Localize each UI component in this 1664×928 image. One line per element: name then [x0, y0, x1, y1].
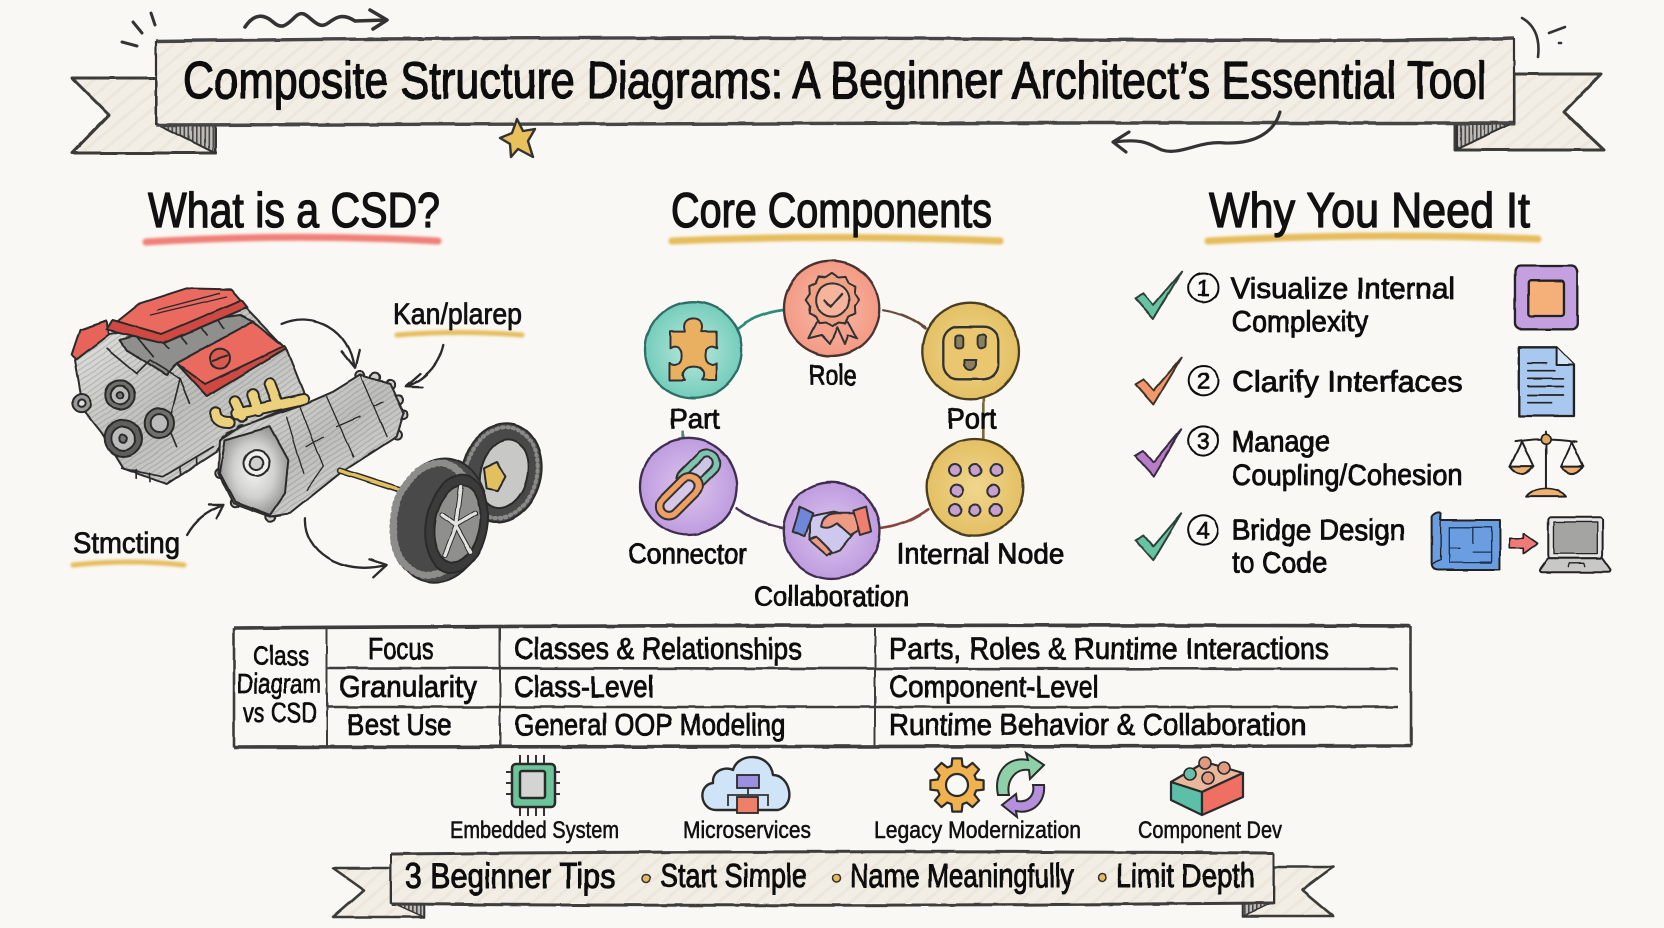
item 4: bridge design to code: [1135, 513, 1611, 579]
item 2: clarify interfaces: [1135, 347, 1574, 416]
chart: core components ring: [628, 261, 1064, 613]
item 4: bridge design to code: Bridge Design: [1232, 514, 1405, 547]
use case: legacy modernization: [874, 753, 1081, 844]
item 2: clarify interfaces: Clarify Interfaces: [1232, 366, 1463, 399]
front wheel: [380, 450, 499, 592]
use case: microservices: [683, 757, 811, 844]
node: Connector: [628, 438, 747, 570]
decorative sparks, top right: [1522, 18, 1565, 57]
node: Role: Role: [808, 360, 857, 392]
node: Internal Node: Internal Node: [897, 538, 1064, 570]
tips text: 3 Beginner Tips: [405, 857, 615, 896]
row labels: Diagram: [237, 668, 321, 699]
row: best use: Runtime Behavior & Collaboration: [889, 707, 1306, 742]
node: Port: [922, 303, 1019, 435]
item 4: bridge design to code: to Code: [1232, 546, 1327, 579]
node: Port: Port: [947, 403, 997, 435]
row labels: [237, 640, 321, 728]
gold exhaust manifold: [215, 384, 303, 423]
tips banner: [333, 852, 1333, 917]
row: focus: Parts, Roles & Runtime Interactions: [889, 631, 1329, 666]
row: best use: General OOP Modeling: [514, 707, 786, 742]
row: best use: [347, 707, 1306, 742]
item 2: clarify interfaces: 2: [1197, 368, 1210, 394]
item 1: visualize internal complexity: Visualize Internal: [1231, 272, 1455, 305]
row: granularity: Class-Level: [514, 669, 654, 704]
item 3: manage coupling/cohesion: Coupling/Cohesion: [1232, 459, 1463, 492]
item 1: visualize internal complexity: [1135, 266, 1577, 339]
item 4: bridge design to code: 4: [1197, 517, 1210, 543]
title banner: [72, 38, 1604, 153]
list: why you need it: [1135, 266, 1611, 579]
connector lines: [683, 310, 983, 528]
node: Part: [645, 302, 742, 435]
row: granularity: Component-Level: [889, 669, 1099, 704]
node: Internal Node: [897, 439, 1064, 570]
rear wheel: [451, 415, 552, 531]
row: granularity: Granularity: [339, 669, 477, 704]
item 3: manage coupling/cohesion: [1135, 426, 1583, 497]
item 3: manage coupling/cohesion: Manage: [1232, 426, 1330, 459]
table grid: [234, 625, 1411, 747]
pulleys: [72, 394, 91, 413]
tips text: Name Meaningfully: [850, 857, 1074, 894]
assembly arrows: [282, 320, 359, 368]
icon: star: [500, 119, 535, 157]
heading: Why You Need It: Why You Need It: [1209, 184, 1530, 238]
transmission: [215, 371, 408, 521]
node: Collaboration: Collaboration: [754, 581, 909, 613]
use case: component dev: Component Dev: [1138, 817, 1282, 844]
use case: microservices: Microservices: [683, 817, 811, 844]
item 3: manage coupling/cohesion: 3: [1197, 428, 1210, 454]
node: Connector: Connector: [628, 538, 747, 570]
use case: component dev: [1138, 757, 1282, 844]
row: focus: Classes & Relationships: [514, 631, 802, 666]
row: focus: Focus: [368, 631, 434, 666]
use case: embedded system: Embedded System: [450, 817, 619, 844]
tips text: Limit Depth: [1116, 857, 1255, 894]
decorative sparks and squiggle arrow, top left: [122, 10, 387, 46]
node: Part: Part: [669, 403, 720, 435]
row labels: Class: [253, 640, 309, 671]
row labels: vs CSD: [243, 697, 317, 728]
row: best use: Best Use: [347, 707, 452, 742]
use case: embedded system: [450, 755, 619, 844]
label: Stmcting: Stmcting: [73, 527, 180, 560]
item 1: visualize internal complexity: 1: [1197, 275, 1210, 301]
use case: legacy modernization: Legacy Modernization: [874, 817, 1081, 844]
row: focus: [368, 631, 1329, 666]
item 1: visualize internal complexity: Complexity: [1232, 306, 1369, 339]
comparison table: class diagram vs CSD: [234, 625, 1411, 747]
node: Role: [784, 261, 879, 392]
gold shaft: [340, 471, 399, 490]
label: Kan/plarep: Kan/plarep: [393, 298, 522, 331]
row: granularity: [339, 669, 1099, 704]
illustration: engine, transmission and wheels: [72, 288, 552, 592]
heading: What is a CSD?: What is a CSD?: [148, 184, 440, 238]
squiggle arrow under title: [1113, 112, 1280, 152]
node: Collaboration: [754, 482, 909, 613]
engine block: [75, 308, 307, 484]
heading: Core Components: Core Components: [671, 184, 992, 238]
red valve covers: [72, 321, 108, 359]
tips text: Start Simple: [660, 857, 807, 894]
tips text: [405, 857, 1255, 896]
